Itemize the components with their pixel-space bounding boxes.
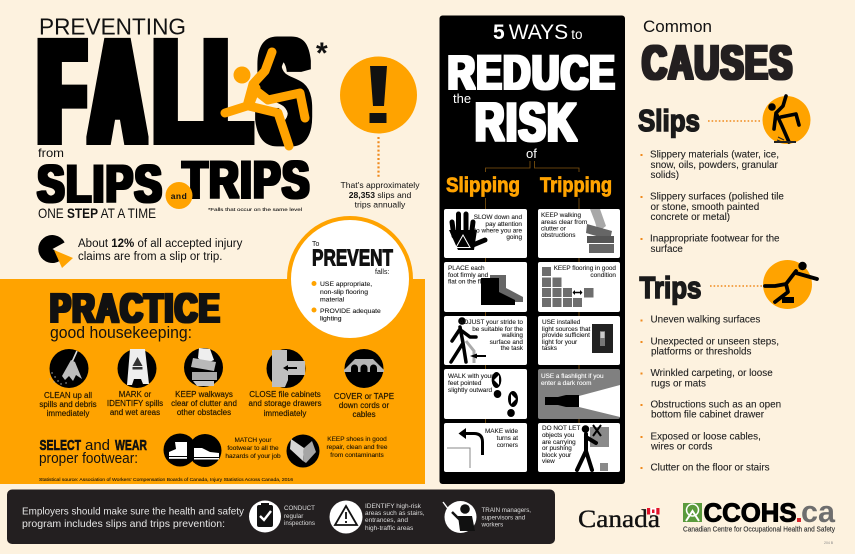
footnote: *Falls that occur on the same level — [208, 207, 302, 213]
list: slip causes: Slippery surfaces (polished tile — [650, 192, 784, 202]
icon: exclamation circle — [340, 56, 417, 134]
caption: clean up: immediately — [47, 409, 89, 418]
text: match footwear: MATCH your — [234, 437, 272, 444]
card: walk with feet outward: WALK with your — [448, 373, 494, 380]
text: identify high-risk areas: entrances, and — [365, 517, 408, 524]
text: annual count: That's approximately — [340, 180, 420, 190]
list: trip causes: rugs or mats — [651, 378, 706, 390]
source note: Statistical source: Association of Workers' Compensation Boards of Canada, Injury Statistics Across Canada, 2016 — [39, 477, 293, 483]
card: use a flashlight — [538, 369, 620, 419]
card: slow down: going — [506, 234, 522, 241]
card: slow down — [444, 209, 527, 258]
panel: 5 ways to reduce the risk — [440, 16, 625, 484]
card: do not let objects block view — [538, 423, 620, 472]
text: keep shoes: from contaminants — [330, 452, 384, 459]
icon: hand and boxes — [184, 348, 223, 387]
card: make wide turns: corners — [497, 442, 518, 449]
card: place each foot: flat on the floor — [448, 278, 491, 286]
dotted connector — [377, 137, 380, 178]
card: adjust your stride: surface and — [490, 339, 523, 346]
heading: select and wear: and — [85, 437, 110, 454]
dotted connector: slips — [708, 120, 760, 122]
heading: reduce: REDUCE — [448, 47, 616, 100]
chart: 12 percent pie — [35, 231, 73, 268]
card: place each foot: PLACE each — [448, 265, 485, 272]
card: use installed light sources: tasks — [542, 345, 557, 352]
logo: ccohs: CCOHS — [704, 498, 796, 528]
card: keep walking areas clear: obstructions — [541, 232, 575, 239]
caption: cover cords: COVER or TAPE — [334, 392, 394, 401]
title: falls: FALLS — [40, 12, 308, 173]
list: trip causes: Unexpected or unseen steps, — [650, 336, 779, 348]
text: employers statement: program includes slips and trips prevention: — [22, 518, 225, 530]
heading: prevent: PREVENT — [312, 244, 393, 270]
card: adjust your stride: ADJUST your stride to — [460, 319, 523, 326]
heading: causes: CAUSES — [642, 37, 794, 90]
heading: select and wear: SELECT — [40, 437, 81, 454]
icon: clipboard — [249, 500, 281, 532]
caption: close cabinets: CLOSE file cabinets — [249, 390, 321, 399]
list: slip causes: solids) — [650, 170, 679, 181]
badge: and: and — [171, 191, 187, 201]
card: use installed light sources: provide sufficient — [542, 332, 590, 339]
list: trip causes: Obstructions such as an open — [650, 400, 781, 410]
caption: close cabinets: immediately — [264, 409, 306, 418]
text: train managers: TRAIN managers, — [482, 507, 531, 514]
card: do not let objects block view: are carrying — [542, 439, 576, 446]
label: of: of — [526, 146, 537, 161]
caption: cover cords: cables — [352, 410, 376, 419]
label: from: from — [38, 146, 64, 160]
card: do not let objects block view: view — [542, 458, 555, 465]
bracket connectors — [486, 161, 579, 423]
caption: keep walkways: other obstacles — [177, 408, 231, 417]
heading: common: Common — [643, 18, 712, 36]
caption: cover cords: down cords or — [339, 401, 389, 410]
card: walk with feet outward — [444, 369, 527, 419]
icon: covered cables — [344, 349, 384, 388]
icon: wet floor sign — [118, 349, 156, 388]
heading: slipping: Slipping — [446, 174, 520, 197]
list: slip causes: concrete or metal) — [650, 212, 730, 223]
heading: tripping: Tripping — [540, 174, 612, 197]
text: keep shoes: repair, clean and free — [326, 444, 388, 451]
heading: slips: Slips — [638, 103, 700, 138]
caption: clean up: CLEAN up all — [44, 391, 92, 400]
list: slip causes: Inappropriate footwear for the — [650, 234, 780, 244]
callout: to prevent falls: USE appropriate, — [320, 281, 372, 288]
title: trips: TRIPS — [182, 151, 311, 210]
card: place each foot: foot firmly and — [448, 272, 489, 279]
icon: broom — [50, 349, 88, 388]
text: keep shoes: KEEP shoes in good — [327, 436, 387, 443]
panel: employers bar — [7, 490, 555, 544]
icon: shoe sole book — [286, 434, 320, 468]
callout: to prevent falls: non-slip flooring — [320, 289, 368, 296]
title: slips: SLIPS — [37, 155, 163, 214]
text: conduct inspections: CONDUCT — [284, 505, 315, 512]
icon: warning triangle — [330, 500, 362, 534]
list: trip causes — [640, 314, 781, 474]
asterisk: * — [316, 37, 328, 70]
card: keep flooring in good condition — [538, 262, 620, 312]
card: adjust your stride: walking — [501, 332, 523, 339]
text: annual count: trips annually — [355, 200, 406, 210]
text: employers statement: Employers should make sure the health and safety — [22, 506, 245, 518]
card: do not let objects block view: block your — [542, 452, 572, 459]
subheading: good housekeeping: good housekeeping: — [50, 323, 192, 342]
logo: ccohs: ca — [801, 494, 836, 529]
list: slip causes: Slippery materials (water, ice, — [650, 150, 779, 160]
card: make wide turns: MAKE wide — [485, 428, 518, 435]
subheading: proper footwear: proper footwear: — [39, 451, 138, 467]
caption: clean up: spills and debris — [39, 400, 97, 409]
card: use a flashlight: USE a flashlight if you — [541, 373, 604, 380]
heading: select and wear — [40, 437, 147, 454]
card: keep walking areas clear: KEEP walking — [541, 212, 581, 219]
callout: to prevent falls: lighting — [320, 316, 342, 322]
text: train managers: workers — [480, 522, 503, 528]
caption: keep walkways: clear of clutter and — [171, 399, 237, 408]
card: do not let objects block view: DO NOT LET — [542, 425, 580, 432]
caption: mark: IDENTIFY spills — [107, 399, 163, 408]
caption: keep walkways: KEEP walkways — [175, 390, 233, 399]
list: slip causes: or stone, smooth painted — [650, 202, 759, 213]
card: use installed light sources: light sources that — [542, 326, 591, 333]
card: keep flooring in good condition: condition — [590, 272, 616, 279]
card: keep walking areas clear: clutter or — [541, 226, 567, 232]
list: slip causes: snow, oils, powders, granular — [650, 160, 779, 171]
card: slow down: pay attention — [485, 221, 522, 228]
card: use installed light sources: light for your — [542, 339, 578, 346]
text: 12 percent claims: claims are from a slip or trip. — [78, 251, 222, 263]
heading: 5 ways to: 5WAYSto — [493, 21, 582, 44]
document code: 204 B — [824, 541, 834, 545]
callout: to prevent falls: To — [312, 241, 320, 248]
text: conduct inspections: inspections — [284, 520, 315, 527]
text: identify high-risk areas: high-traffic areas — [365, 525, 414, 532]
card: keep walking areas clear — [538, 209, 620, 258]
title: preventing: PREVENTING — [39, 14, 186, 40]
logo subtitle: Canadian Centre for Occupational Health and Safety — [683, 524, 835, 534]
icon: trainer — [443, 501, 476, 533]
card: make wide turns: turns at — [497, 435, 518, 442]
heading: risk: RISK — [475, 91, 578, 153]
card: walk with feet outward: feet pointed — [448, 380, 482, 387]
card: keep flooring in good condition: KEEP flooring in good — [554, 265, 616, 272]
card: slow down: to where you are — [474, 228, 522, 234]
card: use installed light sources — [538, 316, 620, 365]
logo: ccohs — [683, 494, 836, 534]
text: match footwear: hazards of your job — [225, 453, 281, 460]
tagline: ONE STEP AT A TIME — [38, 205, 156, 221]
list: trip causes: Exposed or loose cables, — [650, 432, 761, 442]
text: conduct inspections: regular — [284, 513, 303, 520]
card: keep walking areas clear: areas clear from — [541, 219, 587, 226]
icon: file cabinet drawer — [266, 349, 306, 388]
callout: to prevent falls: falls: — [375, 269, 389, 276]
caption: mark: and wet areas — [110, 408, 160, 417]
callout: to prevent falls: PROVIDE adequate — [320, 308, 381, 315]
callout: to prevent falls: material — [320, 296, 345, 304]
icon: boot and shoe — [164, 434, 222, 467]
list: trip causes: wires or cords — [650, 442, 713, 452]
card: place each foot — [444, 262, 527, 312]
heading: trips: Trips — [640, 270, 702, 305]
caption: close cabinets: and storage drawers — [249, 399, 321, 408]
heading: practice: PRACTICE — [50, 285, 221, 331]
badge: and — [166, 182, 192, 209]
list: trip causes: Wrinkled carpeting, or loose — [650, 368, 773, 379]
heading: select and wear: WEAR — [115, 437, 147, 454]
card: make wide turns — [444, 423, 527, 472]
card: adjust your stride — [444, 316, 527, 365]
list: trip causes: bottom file cabinet drawer — [651, 410, 765, 420]
text: annual count: 28,353 slips and — [349, 190, 411, 200]
text: identify high-risk areas: areas such as stairs, — [365, 510, 425, 517]
text: match footwear: footwear to all the — [227, 445, 279, 452]
list: slip causes — [640, 150, 784, 255]
icon: slipping person — [762, 96, 810, 144]
logo: canada wordmark: Canada — [578, 506, 660, 533]
text: train managers: supervisors and — [482, 514, 526, 522]
dotted connector: trips — [710, 285, 762, 287]
card: walk with feet outward: slightly outward — [448, 387, 492, 394]
list: trip causes: Clutter on the floor or stairs — [650, 462, 770, 474]
label: the: the — [453, 91, 471, 106]
callout: to prevent falls — [289, 218, 411, 340]
card: slow down: SLOW down and — [474, 214, 522, 221]
card: do not let objects block view: objects you — [542, 432, 575, 439]
card: use installed light sources: USE installed — [542, 319, 581, 326]
list: slip causes: surface — [650, 244, 683, 255]
card: adjust your stride: the task — [501, 345, 524, 352]
list: trip causes: platforms or thresholds — [651, 346, 752, 358]
card: adjust your stride: be suitable for the — [472, 326, 523, 333]
caption: mark: MARK or — [119, 390, 152, 399]
icon: tripping person — [763, 260, 817, 309]
text: 12 percent claims: About 12% of all accepted injury — [78, 238, 242, 250]
card: use a flashlight: enter a dark room — [541, 380, 591, 387]
icon: falling person — [225, 52, 305, 146]
panel: practice good housekeeping — [0, 279, 425, 484]
text: identify high-risk areas: IDENTIFY high-risk — [365, 503, 422, 510]
card: do not let objects block view: or pushing — [542, 445, 572, 452]
list: trip causes: Uneven walking surfaces — [650, 314, 760, 326]
